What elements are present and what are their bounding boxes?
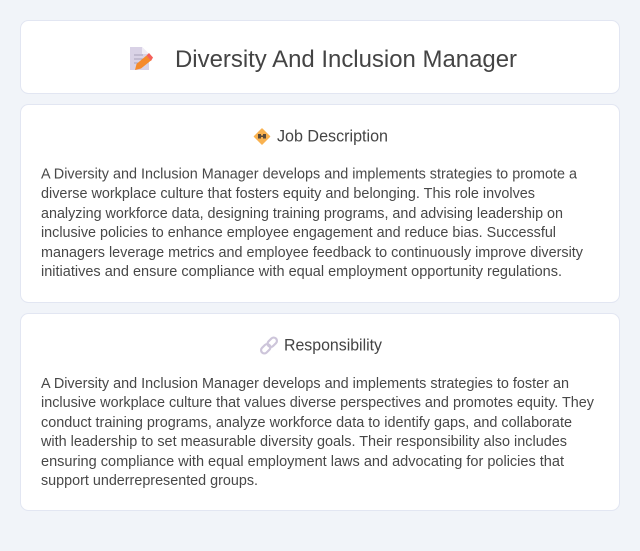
icon: document with pencil (130, 47, 153, 70)
text block: job description (41, 166, 584, 280)
text block: responsibility: conduct training programs, analyze workforce data to identify gaps, and collaborate (41, 415, 572, 431)
text block: responsibility: with leadership to set measurable diversity goals. Their responsibility also includes (40, 434, 567, 450)
text block: responsibility: inclusive workplace culture that values diverse perspectives and promotes equity. They (41, 395, 595, 411)
panel: title header (20, 20, 620, 94)
panel: responsibility (20, 314, 620, 510)
icon: orange diamond (254, 129, 270, 144)
text block: responsibility: support underrepresented groups. (41, 473, 258, 489)
text block: job description: initiatives and ensure compliance with equal employment opportunity regulations. (41, 264, 562, 280)
text block: responsibility (40, 376, 595, 489)
heading: responsibility: Responsibility (284, 336, 383, 354)
text block: job description: analyzing workforce data, designing training programs, and advising leadership on (41, 206, 563, 222)
text block: job description: managers leverage metrics and employee feedback to continuously improve diversity (41, 245, 584, 261)
text block: job description: A Diversity and Inclusion Manager develops and implements strategies to promote a (41, 166, 578, 182)
text block: responsibility: ensuring compliance with equal employment laws and advocating for policies that (41, 454, 564, 470)
panel: job description (20, 104, 620, 302)
heading: job description: Job Description (277, 128, 388, 146)
title: Diversity And Inclusion Manager (175, 46, 517, 73)
text block: job description: inclusive policies to enhance employee engagement and reduce bias. Successful (41, 225, 556, 241)
icon: chain link (260, 336, 278, 355)
text block: responsibility: A Diversity and Inclusion Manager develops and implements strategies to foster an (41, 376, 569, 392)
text block: job description: diverse workplace culture that fosters equity and belonging. This role involves (41, 186, 535, 202)
